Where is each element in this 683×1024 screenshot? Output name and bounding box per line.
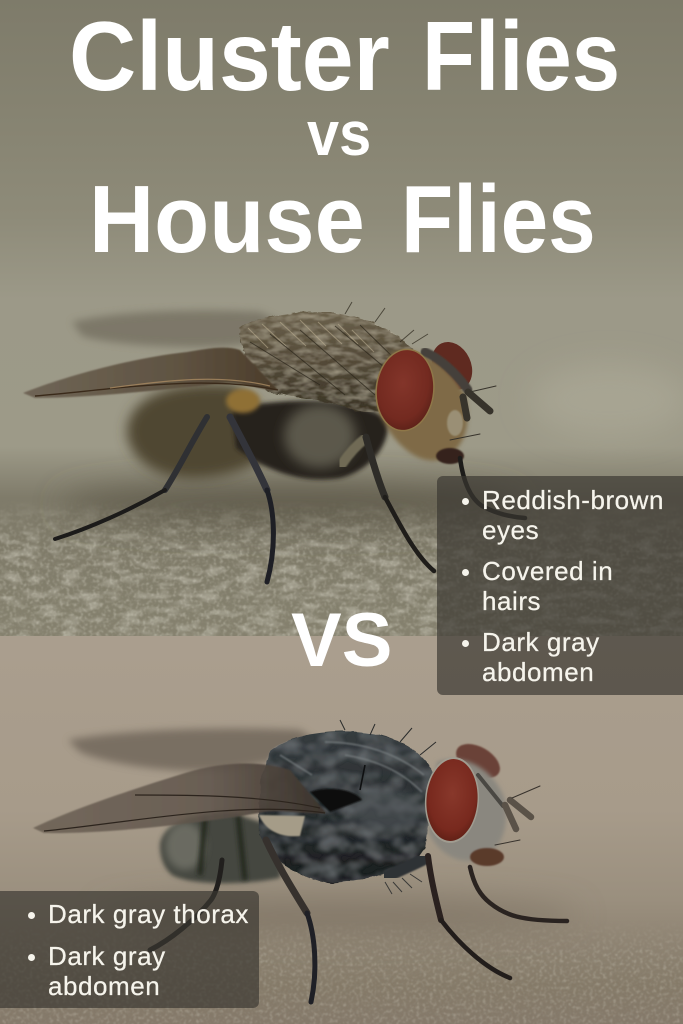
- fly: house fly: [33, 720, 567, 1002]
- far eye: [450, 737, 506, 785]
- trait: reddish-brown eyes: eyes: [482, 515, 539, 545]
- trait: covered in hairs: [482, 556, 613, 616]
- trait: dark gray thorax: Dark gray thorax: [48, 899, 249, 929]
- head: [428, 759, 506, 861]
- legs: [150, 840, 567, 1002]
- trait: covered in hairs: Covered in: [482, 556, 613, 586]
- trait: dark gray abdomen: Dark gray: [482, 627, 600, 657]
- title: House Flies: House: [89, 166, 365, 273]
- callout: cluster fly traits: [437, 476, 683, 695]
- title: House Flies: [89, 166, 596, 273]
- abdomen: [127, 384, 285, 478]
- trait: reddish-brown eyes: Reddish-brown: [482, 485, 664, 515]
- legs: [55, 417, 525, 582]
- antennae: [450, 386, 496, 440]
- belly patch: [284, 404, 356, 468]
- antennae: [495, 786, 540, 845]
- fly: cluster fly: [23, 302, 525, 582]
- trait: dark gray abdomen: Dark gray: [48, 941, 166, 971]
- trait: reddish-brown eyes: [482, 485, 664, 545]
- trait: dark gray abdomen: abdomen: [482, 657, 594, 687]
- callout: house fly traits: [0, 891, 259, 1008]
- center label: VS: VS: [291, 598, 392, 683]
- thorax sheen: [280, 720, 436, 834]
- title: Cluster Flies: Cluster: [69, 1, 390, 111]
- underbody: [232, 401, 388, 479]
- far wing: [68, 728, 330, 771]
- far wing: [72, 310, 300, 347]
- eye: [422, 755, 482, 845]
- far eye: [424, 335, 480, 397]
- title: Cluster Flies: Flies: [422, 1, 620, 111]
- bottom photo backdrop: [0, 636, 683, 1024]
- title: vs: vs: [307, 100, 371, 169]
- head: [378, 351, 468, 461]
- top photo backdrop: [0, 0, 683, 638]
- trait: covered in hairs: hairs: [482, 586, 541, 616]
- trait: dark gray abdomen: [48, 941, 166, 1001]
- eye: [371, 346, 439, 434]
- near wing: [23, 348, 278, 398]
- femur with hairs: [385, 858, 426, 894]
- femur: [342, 438, 366, 464]
- pale wing base: [259, 815, 305, 836]
- trait: dark gray abdomen: abdomen: [48, 971, 160, 1001]
- trait: dark gray abdomen: [482, 627, 600, 687]
- near wing: [33, 764, 326, 833]
- title: Cluster Flies: [69, 1, 620, 111]
- title: House Flies: Flies: [401, 166, 596, 273]
- abdomen: [160, 812, 285, 883]
- thorax: [259, 731, 435, 883]
- yellow wing base: [226, 389, 260, 413]
- thorax: [240, 313, 420, 412]
